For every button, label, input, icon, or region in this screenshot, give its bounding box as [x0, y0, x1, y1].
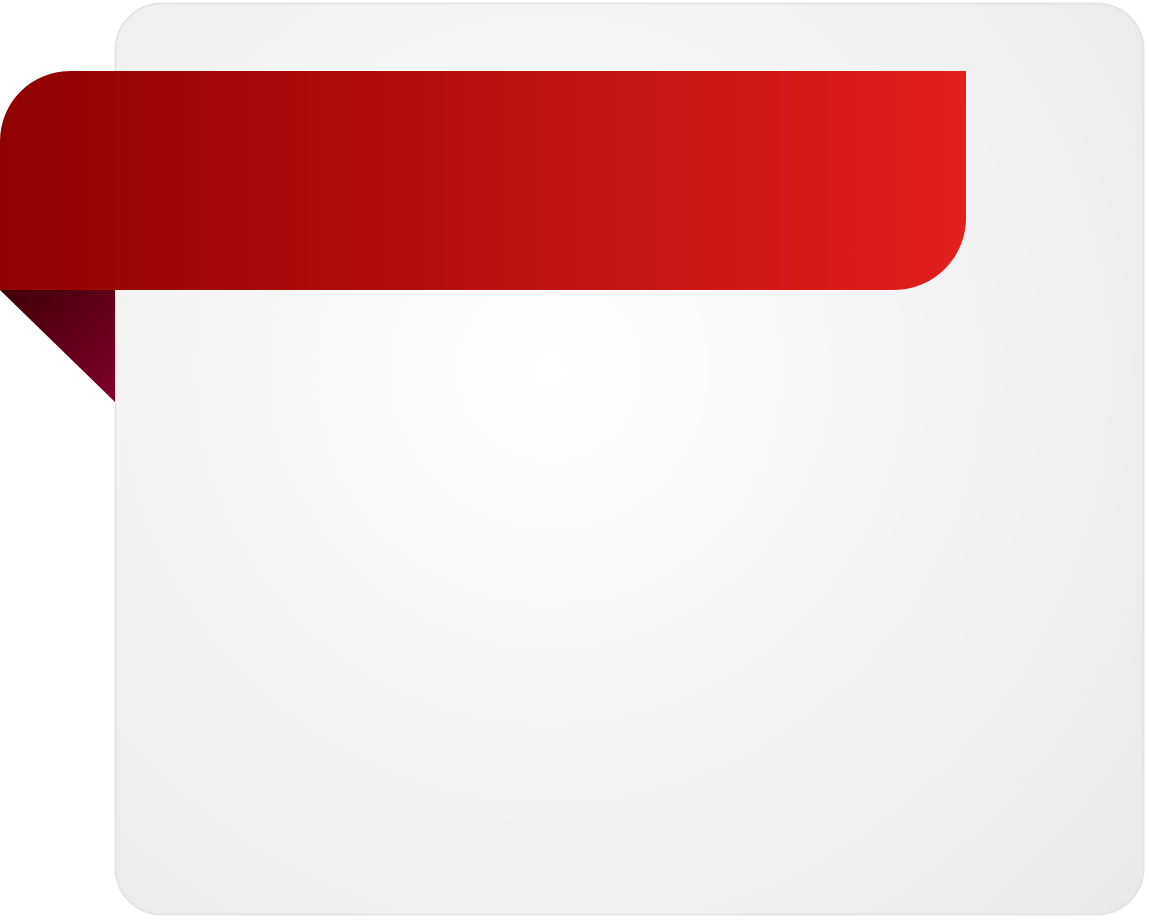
- ribbon banner: [0, 71, 966, 290]
- ribbon fold: [0, 290, 115, 402]
